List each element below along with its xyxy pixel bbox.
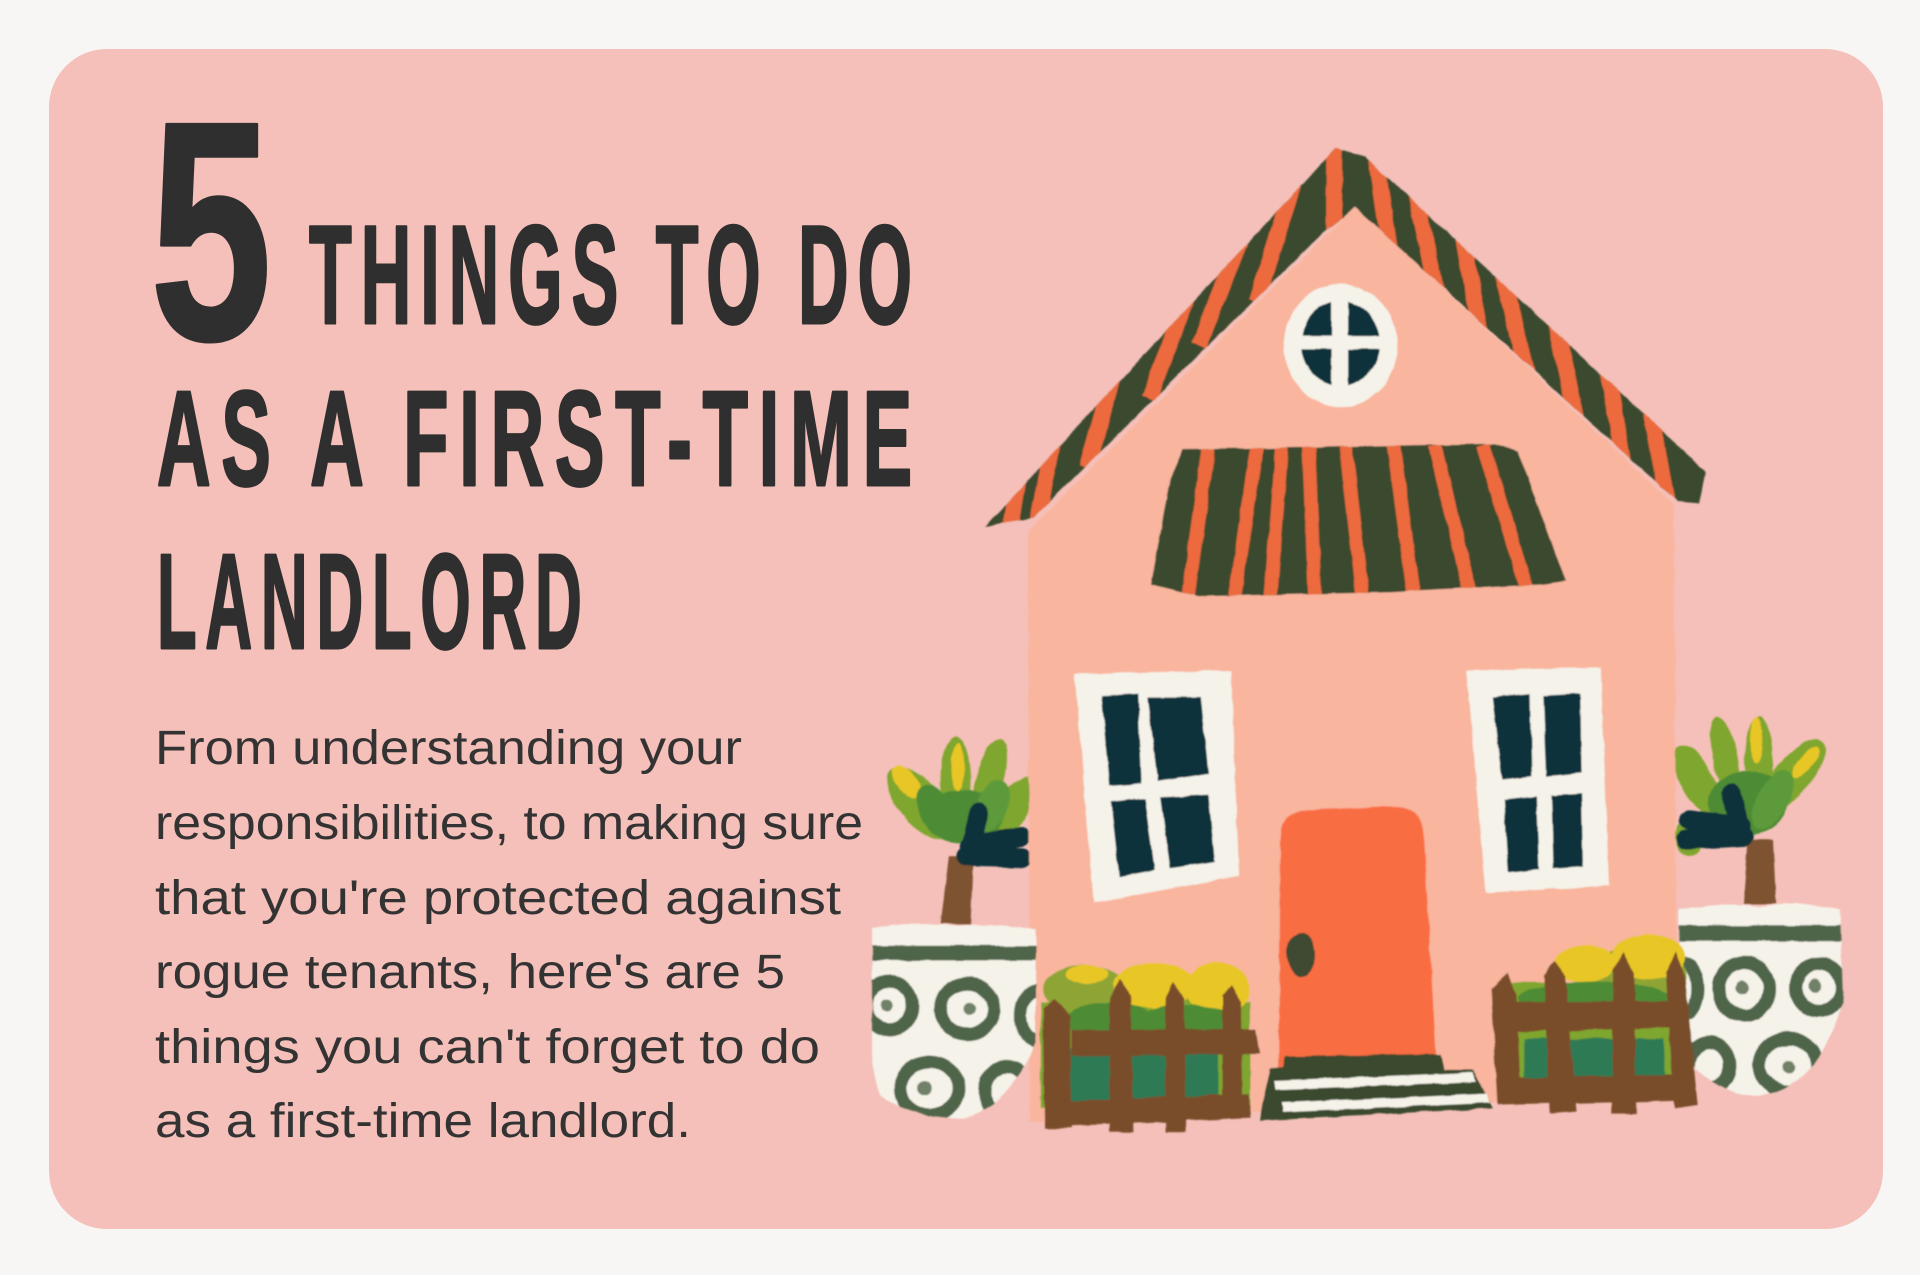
left hedge xyxy=(1039,962,1250,1108)
right plant leaves xyxy=(1664,715,1836,856)
roof xyxy=(984,147,1707,528)
left fence xyxy=(1043,979,1260,1132)
intro paragraph: From understanding your xyxy=(155,722,742,775)
left plant leaves xyxy=(875,735,1047,852)
left plant xyxy=(875,735,1047,924)
intro paragraph: things you can't forget to do xyxy=(155,1021,820,1074)
title xyxy=(150,58,912,677)
right plant trunk xyxy=(1743,840,1776,904)
right plant dark leaves xyxy=(1687,793,1744,840)
title line 3: LANDLORD xyxy=(157,527,582,677)
left pot xyxy=(870,922,1038,1120)
awning xyxy=(1148,438,1569,601)
right hedge xyxy=(1511,935,1687,1082)
intro paragraph: rogue tenants, here's are 5 xyxy=(155,946,785,999)
front steps xyxy=(1259,1054,1492,1120)
title line 1: THINGS TO DO xyxy=(309,198,912,353)
title numeral 5: 5 xyxy=(150,58,272,406)
right plant xyxy=(1664,715,1836,904)
front door xyxy=(1279,807,1436,1069)
right pot xyxy=(1678,902,1845,1096)
intro paragraph: responsibilities, to making sure xyxy=(155,797,863,850)
right window xyxy=(1467,667,1609,893)
right fence xyxy=(1491,952,1698,1114)
title line 2: AS A FIRST-TIME xyxy=(157,364,912,515)
house illustration xyxy=(867,107,1849,1132)
left plant trunk xyxy=(941,856,973,924)
left plant dark leaves xyxy=(966,813,1022,858)
left window xyxy=(1075,671,1239,903)
house wall xyxy=(1028,206,1677,1122)
intro paragraph: that you're protected against xyxy=(155,872,841,925)
intro paragraph: as a first-time landlord. xyxy=(155,1095,691,1148)
intro paragraph xyxy=(155,722,863,1148)
attic round window xyxy=(1284,284,1397,407)
